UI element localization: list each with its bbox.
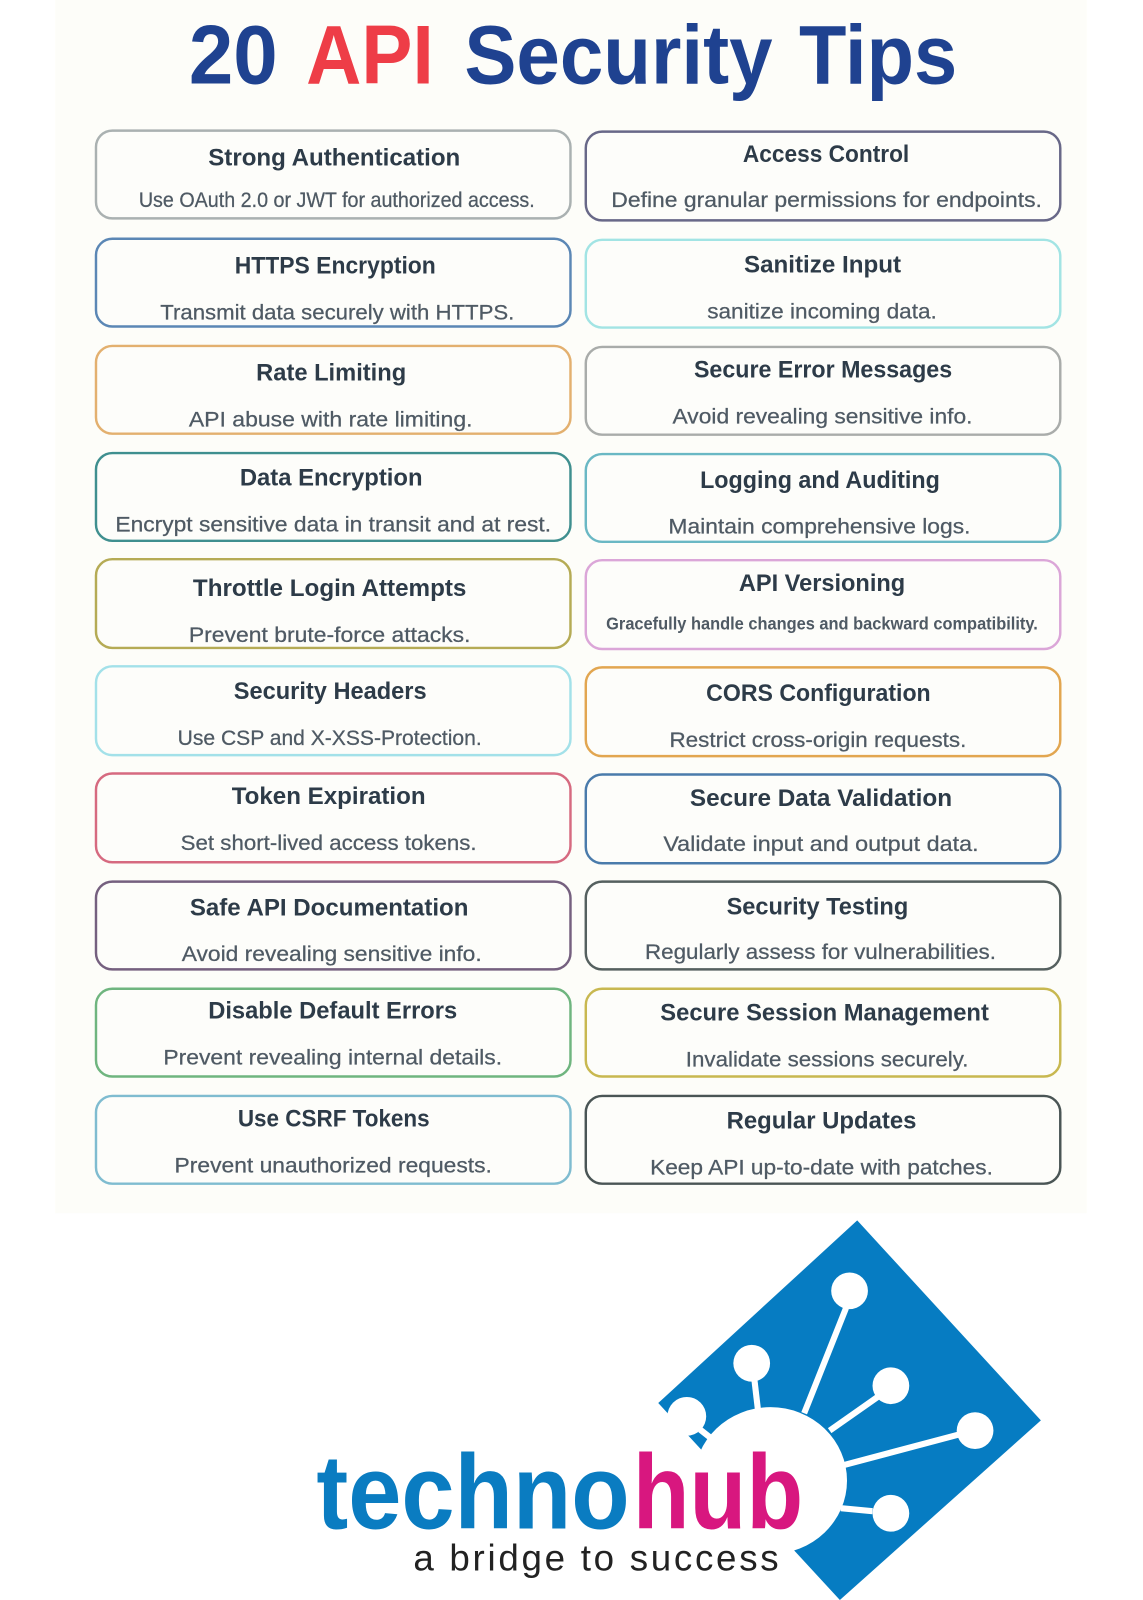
- card: CORS Configuration: [586, 667, 1060, 756]
- card: Use CSRF Tokens: Prevent unauthorized requests.: [175, 1154, 492, 1177]
- card: Access Control: [586, 132, 1060, 220]
- card: Security Headers: Use CSP and X-XSS-Protection.: [178, 727, 482, 750]
- card: Throttle Login Attempts: [96, 559, 570, 648]
- card: Strong Authentication: Use OAuth 2.0 or JWT for authorized access.: [139, 189, 535, 212]
- card: CORS Configuration: CORS Configuration: [706, 680, 931, 707]
- card: API Versioning: API Versioning: [739, 570, 905, 597]
- card: CORS Configuration: Restrict cross-origin requests.: [669, 729, 966, 752]
- card: Regular Updates: [586, 1096, 1060, 1184]
- title: 20: [189, 8, 278, 102]
- card: Data Encryption: Encrypt sensitive data in transit and at rest.: [115, 514, 551, 537]
- card: Safe API Documentation: Avoid revealing sensitive info.: [182, 943, 482, 966]
- title: Security: [464, 8, 773, 102]
- card: Rate Limiting: API abuse with rate limiting.: [189, 409, 473, 432]
- panel: tips background: [55, 0, 1087, 1213]
- card: HTTPS Encryption: [96, 239, 570, 327]
- card: Sanitize Input: Sanitize Input: [744, 251, 901, 278]
- title: Tips: [799, 8, 957, 102]
- title: API: [306, 8, 434, 102]
- card: HTTPS Encryption: HTTPS Encryption: [235, 252, 436, 279]
- card: Secure Data Validation: [586, 774, 1060, 863]
- card: Secure Session Management: [586, 989, 1060, 1077]
- card: Use CSRF Tokens: Use CSRF Tokens: [238, 1106, 430, 1133]
- card: Security Testing: [586, 882, 1060, 969]
- card: Logging and Auditing: Maintain comprehensive logs.: [668, 516, 970, 539]
- card: Security Testing: Regularly assess for vulnerabilities.: [645, 941, 996, 964]
- card: Secure Error Messages: [586, 347, 1060, 435]
- card: Regular Updates: Regular Updates: [727, 1108, 916, 1135]
- card: Token Expiration: Token Expiration: [232, 783, 426, 810]
- card: Logging and Auditing: [586, 454, 1060, 542]
- card: Secure Session Management: Invalidate sessions securely.: [686, 1048, 968, 1071]
- card: Disable Default Errors: Disable Default Errors: [208, 997, 457, 1024]
- card: Logging and Auditing: Logging and Auditing: [700, 467, 940, 494]
- card: Regular Updates: Keep API up-to-date with patches.: [650, 1156, 993, 1179]
- card: Sanitize Input: [586, 240, 1060, 328]
- card: Safe API Documentation: Safe API Documentation: [190, 894, 468, 921]
- card: Data Encryption: Data Encryption: [240, 465, 423, 492]
- card: Throttle Login Attempts: Throttle Login Attempts: [193, 575, 466, 602]
- card: Strong Authentication: [96, 131, 570, 218]
- card: API Versioning: [586, 560, 1060, 649]
- card: Rate Limiting: [96, 346, 570, 434]
- card: Use CSRF Tokens: [96, 1096, 570, 1184]
- card: Token Expiration: [96, 773, 570, 862]
- card: Secure Error Messages: Avoid revealing sensitive info.: [673, 405, 973, 428]
- card: Secure Data Validation: Validate input and output data.: [663, 833, 979, 856]
- card: Token Expiration: Set short-lived access tokens.: [181, 832, 477, 855]
- card: Secure Error Messages: Secure Error Messages: [694, 357, 952, 384]
- icon: blue diamond with hub network: [658, 1220, 1041, 1600]
- card: Disable Default Errors: Prevent revealing internal details.: [163, 1046, 502, 1069]
- wordmark: techno: [316, 1434, 630, 1552]
- card: API Versioning: Gracefully handle changes and backward compatibility.: [606, 614, 1038, 634]
- wordmark: hub: [633, 1434, 803, 1552]
- card: HTTPS Encryption: Transmit data securely with HTTPS.: [160, 301, 514, 324]
- card: Disable Default Errors: [96, 989, 570, 1077]
- card: Access Control: Define granular permissions for endpoints.: [611, 189, 1042, 212]
- title: [189, 8, 957, 102]
- card: Secure Data Validation: Secure Data Validation: [690, 785, 952, 812]
- card: Secure Session Management: Secure Session Management: [660, 999, 989, 1026]
- card: Access Control: Access Control: [743, 141, 909, 168]
- card: Data Encryption: [96, 453, 570, 541]
- card: Rate Limiting: Rate Limiting: [256, 360, 406, 387]
- card: Safe API Documentation: [96, 882, 570, 969]
- card: Security Headers: [96, 666, 570, 755]
- card: Throttle Login Attempts: Prevent brute-force attacks.: [189, 624, 470, 647]
- logo: technohub: [316, 1220, 1041, 1600]
- card: Strong Authentication: Strong Authentication: [208, 144, 460, 171]
- card: Security Testing: Security Testing: [727, 893, 908, 920]
- card: Security Headers: Security Headers: [234, 678, 427, 705]
- card: Sanitize Input: sanitize incoming data.: [707, 300, 937, 323]
- tagline: a bridge to success: [413, 1537, 779, 1578]
